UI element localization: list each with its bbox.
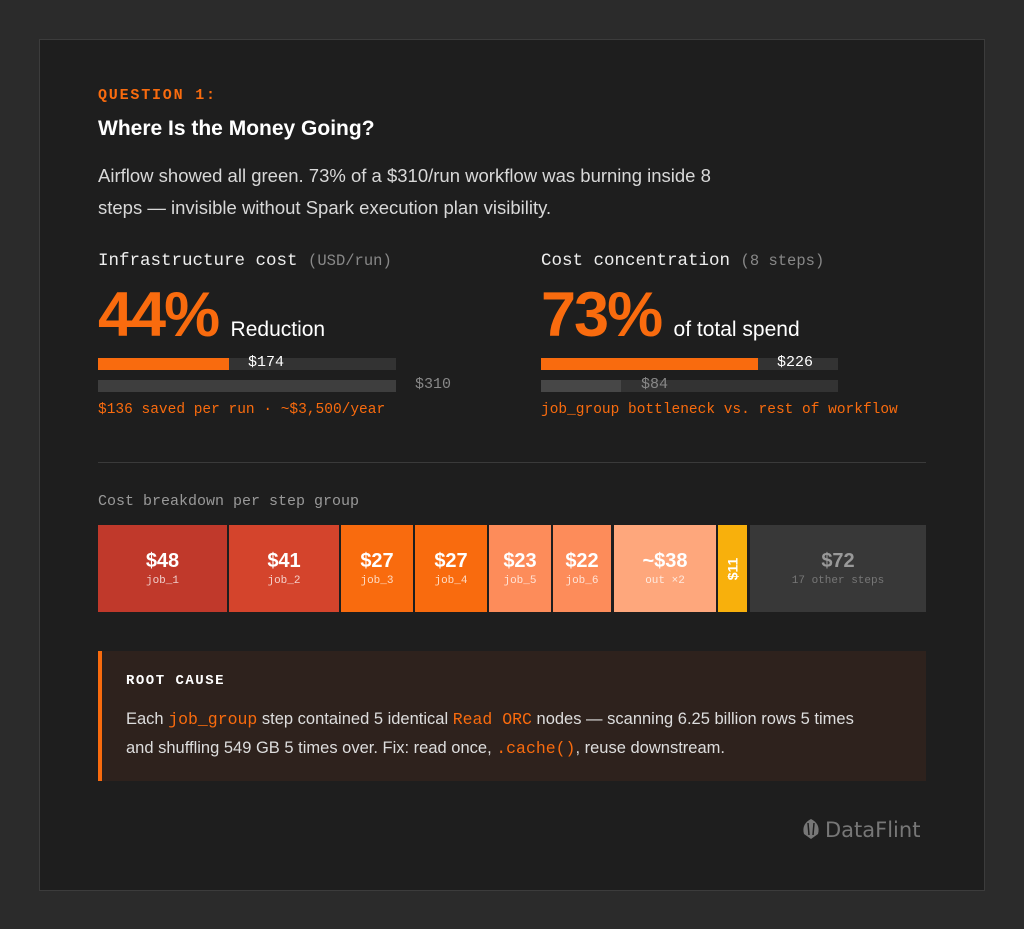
callout: root cause xyxy=(98,651,926,781)
heading: Cost concentration (8 steps) xyxy=(541,251,824,271)
treemap bar: ~$38 xyxy=(642,550,688,572)
panel: infrastructure cost: $174 xyxy=(248,354,284,371)
logo: DataFlint: DataFlint xyxy=(825,818,920,842)
panel: cost concentration xyxy=(541,251,898,418)
treemap bar: out ×2 xyxy=(645,575,685,587)
bar: before xyxy=(98,380,396,392)
big stat: 73% of total spend xyxy=(541,280,800,350)
eyebrow: QUESTION 1: xyxy=(98,87,217,104)
treemap bar: job_1 xyxy=(146,575,179,587)
heading: Infrastructure cost (USD/run) xyxy=(98,251,392,271)
treemap bar: 17 other steps xyxy=(792,575,884,587)
panel: infrastructure cost xyxy=(98,251,451,418)
panel: infrastructure cost: $310 xyxy=(415,376,451,393)
treemap bar: $41 xyxy=(267,550,301,572)
treemap bar: $27 xyxy=(360,550,394,572)
treemap bar: $27 xyxy=(434,550,468,572)
bar: job_group xyxy=(541,358,838,370)
note: $136 saved per run · ~$3,500/year xyxy=(98,402,385,418)
treemap bar: $22 xyxy=(565,550,599,572)
treemap bar: $11 xyxy=(724,558,740,580)
treemap bar xyxy=(98,525,926,612)
breakdown label: Cost breakdown per step group xyxy=(98,493,359,510)
callout: root cause: ROOT CAUSE xyxy=(126,673,225,689)
panel: cost concentration: $226 xyxy=(777,354,813,371)
treemap bar: $23 xyxy=(503,550,537,572)
title: Where Is the Money Going? xyxy=(98,117,375,140)
panel: cost concentration: $84 xyxy=(641,376,668,393)
treemap bar: job_4 xyxy=(434,575,468,587)
bar: after xyxy=(98,358,396,370)
icon: flint xyxy=(803,819,819,839)
big stat: 44% Reduction xyxy=(98,280,325,350)
bar: rest xyxy=(541,380,838,392)
callout: root cause: Each job_group step contained 5 identical Read ORC nodes — scanning 6.25 billion rows 5 times xyxy=(126,710,854,729)
treemap bar: $48 xyxy=(146,550,179,572)
note: job_group bottleneck vs. rest of workflow xyxy=(541,402,898,418)
treemap bar: $72 xyxy=(821,550,855,572)
treemap bar: job_5 xyxy=(503,575,536,587)
treemap bar: job_6 xyxy=(565,575,598,587)
treemap bar: job_2 xyxy=(267,575,300,587)
callout: root cause: and shuffling 549 GB 5 times over. Fix: read once, .cache(), reuse downstream. xyxy=(126,739,725,758)
intro text: Airflow showed all green. 73% of a $310/run workflow was burning inside 8 steps — invisible without Spark execution plan visibility. xyxy=(98,165,711,218)
treemap bar: job_3 xyxy=(360,575,394,587)
